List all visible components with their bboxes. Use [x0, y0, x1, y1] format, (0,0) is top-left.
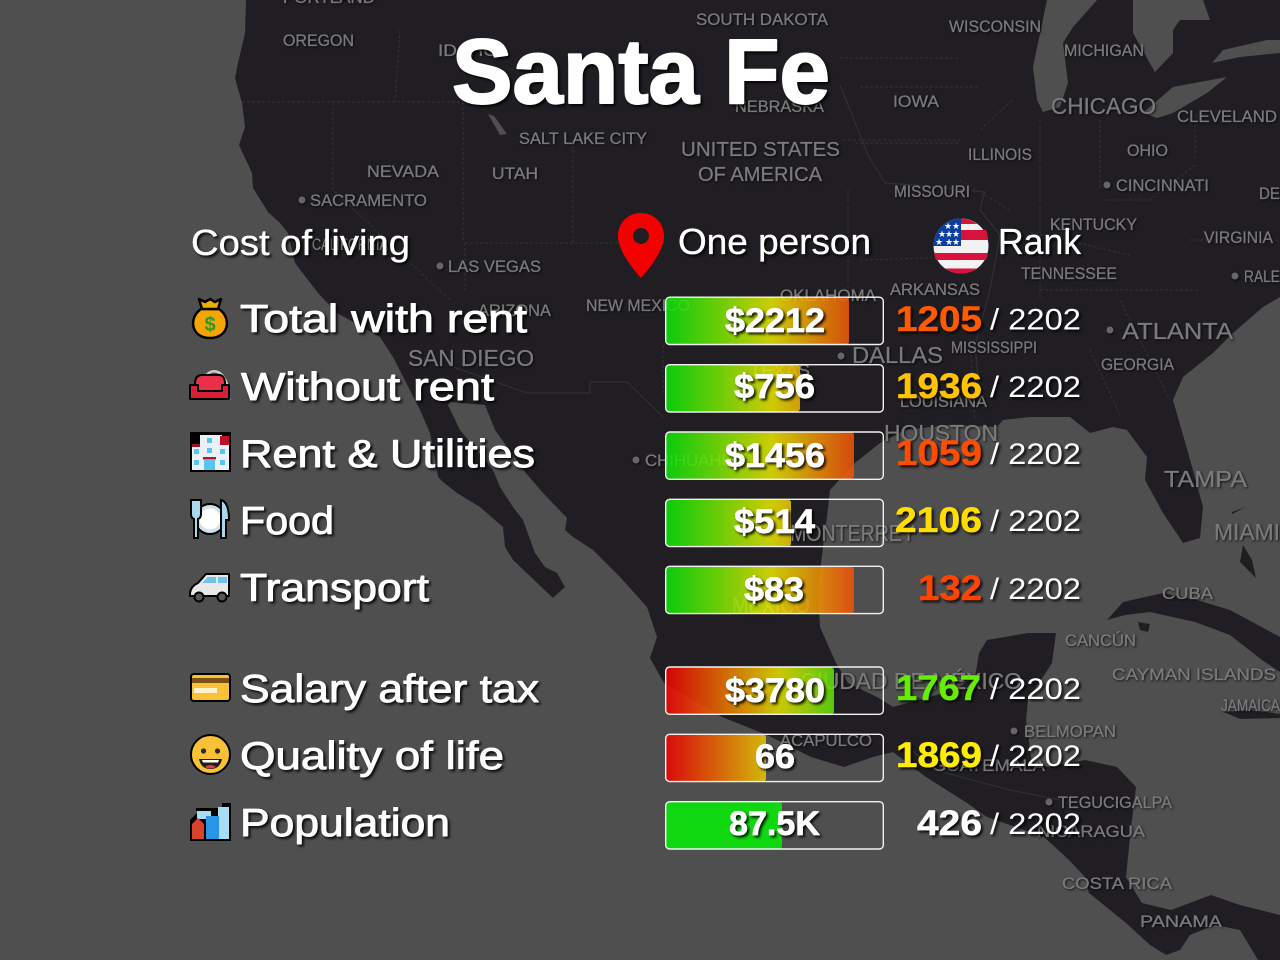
icon: money bag: [193, 299, 227, 338]
rank: [896, 367, 1081, 406]
rank: / 2202: [990, 808, 1081, 841]
label: Population: [240, 802, 450, 845]
rank: / 2202: [990, 573, 1081, 606]
row: quality of life: [191, 734, 1081, 782]
map place labels: TEGUCIGALPA: [1058, 794, 1172, 812]
map place labels: LAS VEGAS: [448, 258, 541, 276]
map place labels: ILLINOIS: [968, 146, 1032, 164]
rank: / 2202: [990, 438, 1081, 471]
rank: [895, 501, 1081, 540]
row: food: [191, 499, 1081, 547]
icon: hotel: [190, 432, 231, 472]
icon: US flag: ★: [935, 237, 943, 247]
rank: 426: [917, 804, 982, 843]
map place labels: UTAH: [492, 165, 538, 183]
bar: [666, 734, 883, 782]
map place labels: SALT LAKE CITY: [519, 130, 647, 148]
icon: smiling face: [191, 735, 230, 774]
bar: $83: [744, 571, 804, 609]
icon: US flag: ★: [944, 221, 952, 231]
bar: [666, 364, 883, 412]
map place labels: CHICAGO: [1051, 93, 1156, 119]
rank: / 2202: [990, 740, 1081, 773]
icon: US flag: ★: [945, 229, 953, 239]
caribbean islands: [1107, 507, 1280, 719]
row: population: [190, 802, 1081, 849]
rank: / 2202: [990, 371, 1081, 404]
map place labels: COSTA RICA: [1062, 875, 1172, 893]
map place labels: CALIFORNIA: [312, 236, 388, 254]
map place labels: CAYMAN ISLANDS: [1112, 666, 1276, 684]
map place labels: NEW MEXICO: [586, 297, 690, 315]
rank: 1936: [896, 367, 982, 406]
icon: sofa: [190, 371, 229, 400]
rank: 1205: [896, 300, 982, 339]
icon: US flag: ★: [952, 237, 960, 247]
icon: US flag: ★: [945, 237, 953, 247]
column headers: [191, 213, 1082, 278]
rank: [896, 669, 1081, 708]
map place labels: SAN DIEGO: [408, 345, 534, 371]
icon: money bag: $: [204, 314, 216, 336]
label: Rent & Utilities: [240, 433, 535, 476]
label: Total with rent: [240, 298, 527, 341]
label: Without rent: [241, 366, 494, 409]
rank: [896, 434, 1081, 473]
bar: 87.5K: [729, 805, 820, 843]
row: total with rent: [193, 297, 1081, 344]
map place labels: LOUISIANA: [900, 393, 987, 411]
row: transport: [190, 566, 1081, 614]
map place labels: OHIO: [1127, 142, 1168, 160]
map place labels: ARIZONA: [478, 302, 551, 320]
title: Santa Fe: [452, 21, 830, 123]
icon: US flag: ★: [952, 221, 960, 231]
map place labels: ACAPULCO: [780, 732, 872, 750]
rank: [896, 736, 1081, 775]
icon: US flag: ★: [952, 229, 960, 239]
map place labels: NEBRASKA: [735, 98, 824, 116]
label: Quality of life: [240, 735, 504, 778]
map place labels: OF AMERICA: [698, 164, 823, 186]
map place labels: GEORGIA: [1101, 356, 1174, 374]
map place labels: UNITED STATES: [681, 139, 840, 161]
rank: / 2202: [990, 304, 1081, 336]
heading: one person: One person: [678, 221, 871, 262]
map place labels: CIUDAD DE MÉXICO: [800, 668, 1022, 694]
heading: rank: Rank: [998, 221, 1082, 262]
bar: [666, 667, 883, 714]
map place labels: TAMPA: [1164, 466, 1248, 492]
map place labels: MISSISSIPPI: [951, 339, 1037, 357]
bar: [666, 802, 883, 849]
bar: [666, 297, 883, 344]
map place labels: PANAMA: [1140, 913, 1222, 931]
label: Food: [240, 500, 334, 543]
map place labels: CUBA: [1162, 585, 1213, 603]
great lakes: [488, 0, 1280, 135]
rank: 132: [918, 569, 982, 608]
bar: [666, 566, 883, 614]
rank: / 2202: [990, 505, 1081, 538]
map place labels: KENTUCKY: [1050, 216, 1137, 234]
row: rent and utilities: [190, 432, 1081, 479]
bar: [666, 499, 883, 547]
icon: US flag: [934, 218, 988, 274]
icon: van: [190, 574, 229, 602]
map place labels: VIRGINIA: [1204, 229, 1273, 247]
icon: credit card: [191, 674, 230, 701]
row: without rent: [190, 364, 1081, 412]
map place labels: TEXAS: [750, 362, 810, 380]
icon: plate and cutlery: [191, 500, 229, 538]
map place labels: SACRAMENTO: [310, 192, 427, 210]
state and country borders: [242, 30, 1280, 420]
rank: 2106: [895, 501, 982, 540]
map place labels: OKLAHOMA: [780, 287, 876, 305]
map place labels: MONTERREY: [790, 520, 915, 546]
map place labels: SOUTH DAKOTA: [696, 11, 828, 29]
rank: [896, 300, 1081, 339]
map place labels: ATLANTA: [1122, 318, 1234, 344]
map place labels: WISCONSIN: [949, 18, 1041, 36]
map place labels: MISSOURI: [894, 183, 970, 201]
map place labels: MIAMI: [1214, 519, 1280, 545]
rank: 1869: [896, 736, 982, 775]
icon: US flag: ★: [938, 229, 946, 239]
rank: [917, 804, 1081, 843]
label: Salary after tax: [240, 668, 540, 711]
map place labels: NICARAGUA: [1037, 823, 1145, 841]
label: Transport: [240, 567, 429, 610]
bar: $1456: [725, 437, 825, 475]
bar: $3780: [725, 672, 825, 710]
rank: / 2202: [990, 673, 1081, 706]
bar: $2212: [725, 302, 825, 340]
map place labels: MEXICO: [732, 592, 810, 618]
icon: map pin: [618, 213, 664, 278]
map place labels: CLEVELAND: [1177, 108, 1277, 126]
map place labels: NEVADA: [367, 163, 439, 181]
map place labels: TENNESSEE: [1021, 265, 1117, 283]
map place labels: OREGON: [283, 32, 354, 50]
bar: [666, 432, 883, 479]
map place labels: MICHIGAN: [1064, 42, 1144, 60]
map place labels: DALLAS: [852, 342, 943, 368]
bar: $756: [734, 368, 815, 406]
map place labels: IDAHO: [438, 42, 498, 60]
bar: 66: [755, 738, 795, 776]
icon: city buildings: [190, 803, 231, 841]
map place labels: CANCÚN: [1065, 631, 1136, 650]
map place labels: CHIHUAHUA: [645, 452, 745, 470]
rank: 1767: [896, 669, 981, 708]
map place labels: HOUSTON: [884, 420, 998, 446]
map place labels: CINCINNATI: [1116, 177, 1209, 195]
map place labels: GUATEMALA: [932, 757, 1045, 775]
row: salary after tax: [191, 667, 1081, 714]
heading: cost of living: Cost of living: [191, 222, 410, 263]
rank: 1059: [896, 434, 982, 473]
rank: [918, 569, 1081, 608]
map place labels: IOWA: [893, 93, 939, 111]
map place labels: ARKANSAS: [890, 281, 980, 299]
map place labels: BELMOPAN: [1024, 723, 1116, 741]
bar: $514: [734, 503, 815, 541]
map place labels: [283, 0, 1280, 931]
